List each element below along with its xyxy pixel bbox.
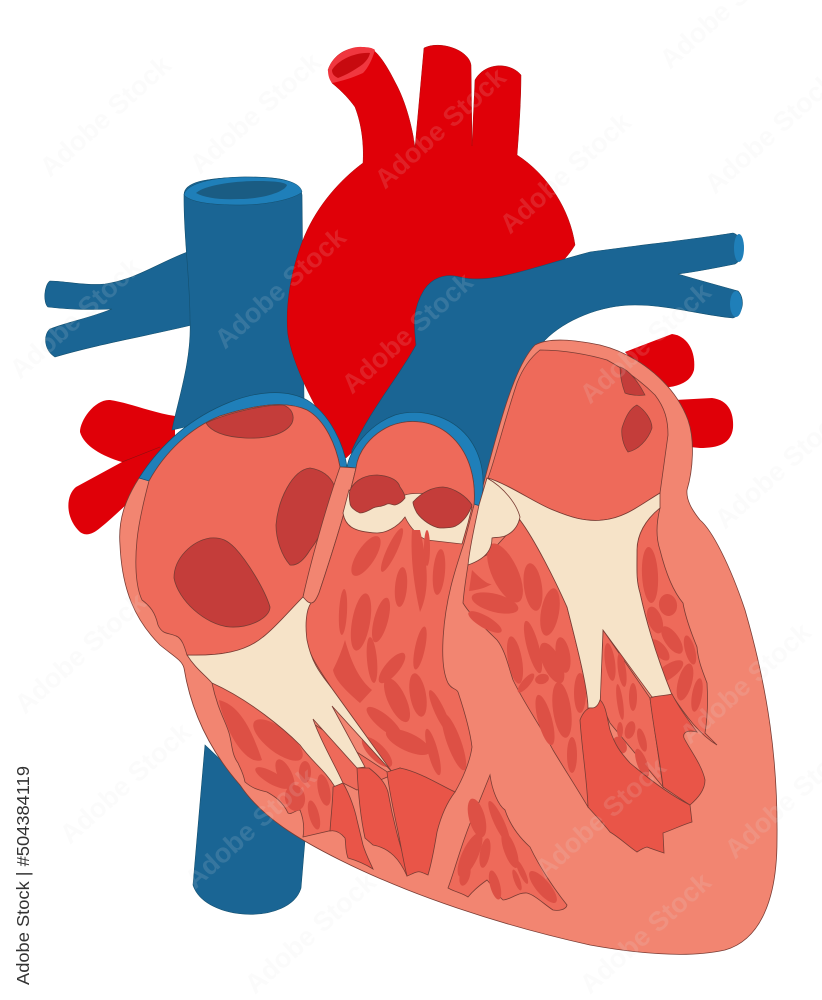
pulmonary valve right leaflet bbox=[413, 487, 472, 528]
watermark: Adobe Stock bbox=[209, 221, 352, 354]
papillary muscle between leaflets bbox=[600, 630, 663, 787]
left atrium chamber bbox=[488, 350, 668, 520]
aorta branch opening bbox=[328, 47, 375, 83]
watermark: Adobe Stock bbox=[574, 276, 717, 409]
watermark: Adobe Stock bbox=[239, 866, 382, 999]
pulmonary artery bbox=[350, 233, 744, 505]
pulmonary valve left leaflet bbox=[349, 475, 405, 513]
inferior vena cava bbox=[193, 745, 305, 914]
watermark: Adobe Stock bbox=[529, 751, 672, 884]
coronary sinus opening bbox=[276, 468, 334, 565]
right ventricle trabeculae lower bbox=[219, 700, 333, 831]
atrial septum bbox=[303, 467, 356, 603]
left ventricle muscle right side bbox=[637, 508, 717, 745]
watermark: Adobe Stock bbox=[4, 251, 147, 384]
inferior vena cava opening in atrium bbox=[174, 538, 270, 627]
pulmonary valve cream cusps bbox=[343, 490, 472, 544]
right atrium chamber bbox=[136, 405, 356, 655]
mitral leaflets bbox=[580, 694, 705, 853]
right pulmonary veins bbox=[625, 334, 733, 448]
watermark: Adobe Stock bbox=[9, 586, 152, 719]
watermark: Adobe Stock bbox=[184, 46, 327, 179]
mitral valve and aortic cusps bbox=[468, 478, 672, 708]
lateral trabeculae bbox=[641, 547, 705, 713]
right ventricle trabeculae bbox=[333, 526, 471, 776]
pulmonary valve blue band bbox=[347, 412, 483, 506]
watermark: Adobe Stock bbox=[34, 49, 177, 182]
watermark: Adobe Stock bbox=[369, 61, 512, 194]
lower muscle trabeculae bbox=[453, 797, 561, 907]
tricuspid valve and chordae bbox=[187, 597, 392, 787]
tricuspid leaflets bbox=[330, 768, 455, 876]
papillary trabeculae bbox=[602, 642, 652, 779]
watermark: Adobe Stock bbox=[336, 266, 479, 399]
interventricular lower muscle bbox=[448, 775, 567, 910]
pulmonary artery branch ends bbox=[734, 234, 744, 262]
watermark: Adobe Stock bbox=[574, 866, 717, 999]
right ventricle inferior wall bbox=[212, 683, 392, 837]
left pulmonary veins bbox=[68, 400, 175, 534]
watermark: Adobe Stock bbox=[674, 616, 817, 749]
watermark: Adobe Stock bbox=[54, 716, 197, 849]
left ventricle trabeculae bbox=[466, 539, 586, 773]
superior vena cava with branches bbox=[45, 177, 304, 430]
watermark: Adobe Stock bbox=[494, 106, 637, 239]
superior vena cava opening in atrium bbox=[206, 405, 293, 438]
stock id caption: Adobe Stock | #504384119 bbox=[13, 766, 33, 985]
right atrium blue band bbox=[139, 393, 347, 481]
vena cava opening bbox=[184, 177, 302, 205]
left ventricle muscle left side bbox=[463, 520, 590, 807]
heart muscle wall bbox=[120, 340, 777, 954]
aorta and arch branches bbox=[287, 45, 575, 458]
pulmonary vein openings bbox=[620, 367, 652, 452]
watermark: Adobe Stock bbox=[179, 761, 322, 894]
right ventricle outflow chamber bbox=[305, 422, 474, 792]
